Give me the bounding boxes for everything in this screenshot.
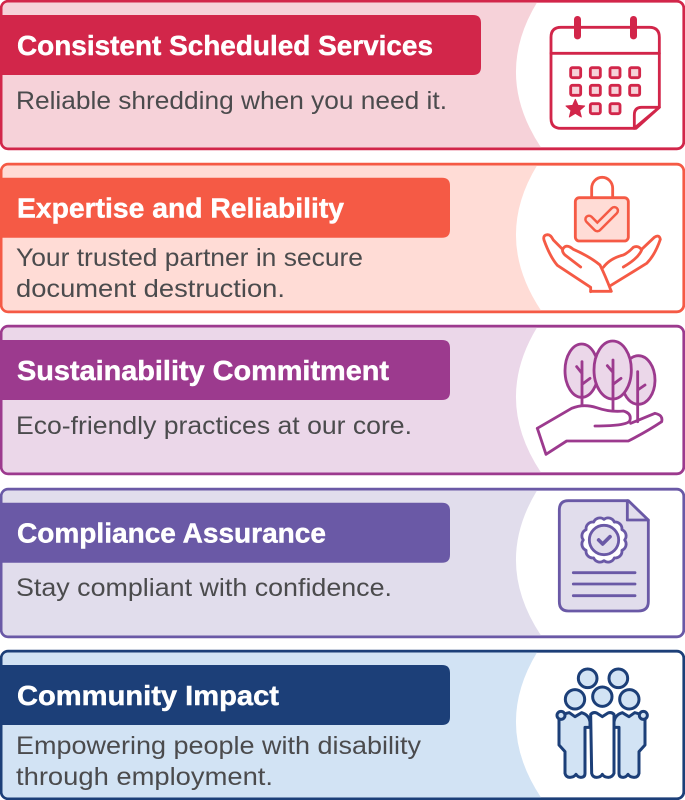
text: description: document destruction. [16,275,285,303]
text: description: through employment. [16,763,273,791]
panel: consistent scheduled services [0,1,684,149]
text: description: Empowering people with disability [16,732,422,760]
icon: padlock in hands [544,177,660,292]
icon: trees on a hand [537,341,662,454]
text: description: Eco-friendly practices at our core. [16,412,412,440]
heading: expertise and reliability: Expertise and Reliability [17,193,344,224]
icon: group of people [557,669,647,777]
panel: community impact [0,651,684,799]
heading: sustainability commitment: Sustainability Commitment [17,355,389,386]
text: description: Stay compliant with confidence. [16,574,392,602]
text: description [16,244,363,303]
text: description [16,732,422,791]
icon: calendar [551,16,659,128]
heading: sustainability commitment [0,340,450,400]
panel: compliance assurance [0,489,684,637]
heading: community impact [0,665,450,725]
heading: compliance assurance: Compliance Assurance [17,518,326,549]
panel: sustainability commitment [0,326,684,474]
text: description: Reliable shredding when you need it. [16,87,447,115]
heading: consistent scheduled services [0,15,481,75]
heading: compliance assurance [0,503,450,563]
icon: certified document [559,501,648,611]
heading: community impact: Community Impact [17,680,279,711]
panel: expertise and reliability [0,164,684,312]
heading: consistent scheduled services: Consistent Scheduled Services [17,30,433,61]
heading: expertise and reliability [0,178,450,238]
text: description: Your trusted partner in secure [16,244,363,272]
